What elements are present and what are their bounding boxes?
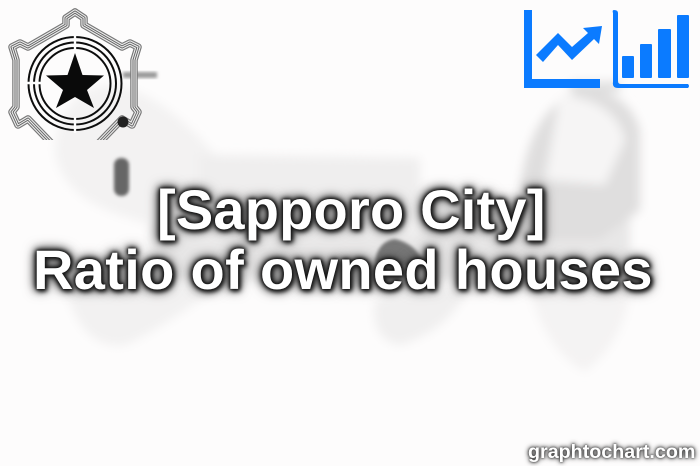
title line 1: [Sapporo City]	[157, 178, 546, 241]
icon: bar chart	[612, 10, 689, 88]
star	[46, 53, 104, 108]
dot	[118, 116, 128, 128]
title line 2: Ratio of owned houses	[33, 238, 653, 301]
watermark: graphtochart.com	[528, 441, 695, 463]
chart axes	[613, 10, 689, 88]
rising arrow	[536, 26, 602, 62]
concentric rings	[28, 37, 122, 130]
emblem outline	[12, 12, 138, 145]
emblem-side shadow bar	[123, 72, 157, 78]
chart axes	[524, 10, 600, 88]
bars	[622, 15, 689, 78]
center metal detail	[375, 239, 424, 268]
ring gaps	[26, 34, 75, 133]
earbud sound port	[114, 158, 129, 196]
icon: line chart trending up	[524, 10, 602, 88]
icon: Sapporo city emblem	[8, 8, 142, 140]
